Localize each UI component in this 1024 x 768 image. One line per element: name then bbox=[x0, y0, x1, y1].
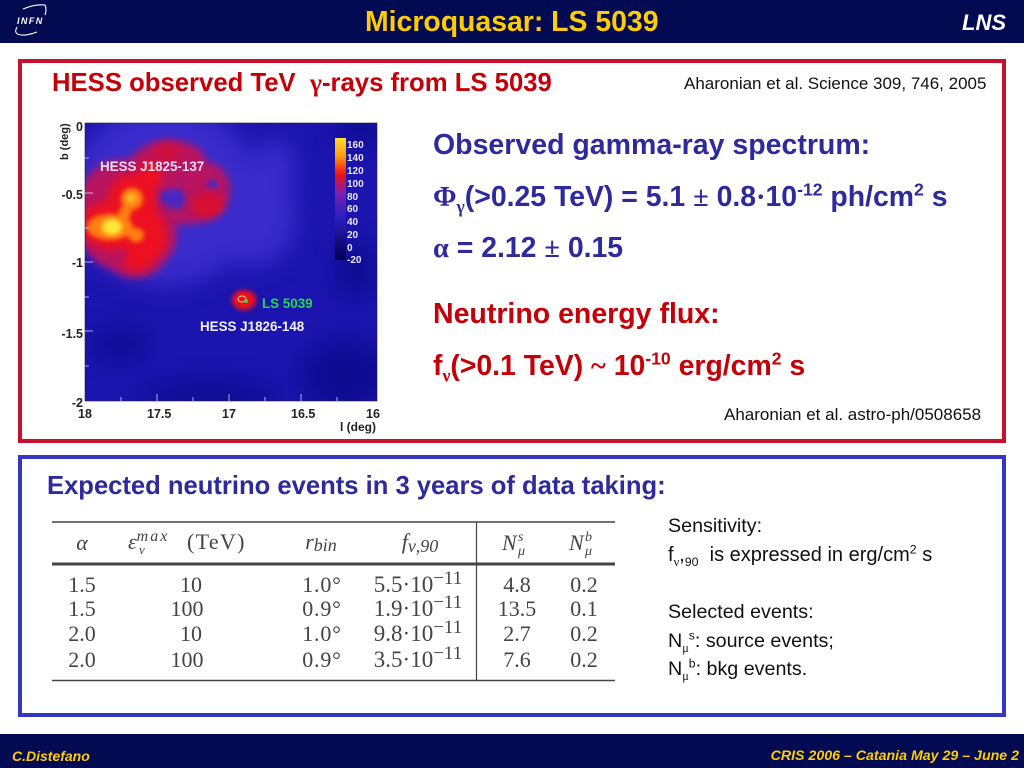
formula: neutrino: fν(>0.1 TeV) ~ 10-10 erg/cm2 s bbox=[433, 349, 805, 386]
table: neutrino events: 10 bbox=[180, 621, 202, 646]
table: neutrino events: 3.5·10 bbox=[374, 647, 433, 672]
table: neutrino events: 5.5·10 bbox=[374, 572, 433, 597]
footer bar bbox=[0, 734, 1024, 768]
axes: -1.5 bbox=[61, 327, 83, 341]
table: neutrino events: 9.8·10 bbox=[374, 621, 433, 646]
footer: conference: CRIS 2006 – Catania May 29 – June 2 bbox=[771, 748, 1019, 764]
source labels: HESS J1826-148 bbox=[200, 319, 305, 334]
color scale: 120 bbox=[347, 166, 364, 177]
table: neutrino events bbox=[52, 521, 615, 682]
source labels: HESS J1825-137 bbox=[100, 159, 204, 174]
panel: HESS observation bbox=[18, 59, 1006, 443]
color scale: 80 bbox=[347, 192, 359, 203]
axes: l (deg) bbox=[340, 420, 376, 434]
table: neutrino events: 0.1 bbox=[570, 596, 598, 621]
table: neutrino events: 2.0 bbox=[68, 621, 96, 646]
color scale: -20 bbox=[347, 255, 362, 266]
table: neutrino events: 10 bbox=[180, 572, 202, 597]
table: neutrino events: 7.6 bbox=[503, 647, 531, 672]
panel: expected events bbox=[18, 455, 1006, 717]
axes bbox=[59, 120, 380, 434]
color scale: 140 bbox=[347, 153, 364, 164]
color scale: 100 bbox=[347, 179, 364, 190]
icon: INFN logo bbox=[15, 4, 47, 36]
table: neutrino events: 2.0 bbox=[68, 647, 96, 672]
table: neutrino events: 13.5 bbox=[498, 596, 536, 621]
table: neutrino events: 0.2 bbox=[570, 572, 598, 597]
notes: sensitivity and selected events: Nμb: bkg events. bbox=[668, 656, 807, 683]
table: neutrino events: ν bbox=[139, 542, 145, 557]
table: neutrino events: 1.0° bbox=[302, 572, 342, 597]
formula: alpha: α = 2.12 ± 0.15 bbox=[433, 232, 623, 264]
color scale: 160 bbox=[347, 140, 364, 151]
axes: 18 bbox=[78, 407, 92, 421]
axes: -0.5 bbox=[61, 188, 83, 202]
axes: b (deg) bbox=[59, 123, 71, 160]
notes: sensitivity and selected events bbox=[668, 515, 932, 683]
table: neutrino events: α bbox=[76, 530, 88, 555]
heading: expected events: Expected neutrino events in 3 years of data taking: bbox=[47, 472, 666, 500]
table: neutrino events: 0.9° bbox=[302, 647, 342, 672]
table: neutrino events: r bbox=[305, 529, 314, 554]
table: neutrino events: 4.8 bbox=[503, 572, 531, 597]
table: neutrino events: 0.9° bbox=[302, 596, 342, 621]
table: neutrino events: bin bbox=[314, 535, 337, 555]
axes: -2 bbox=[72, 396, 83, 410]
citation: astro-ph: Aharonian et al. astro-ph/0508658 bbox=[724, 405, 981, 424]
table: neutrino events: μ bbox=[517, 544, 525, 559]
color scale: 20 bbox=[347, 230, 359, 241]
header bar bbox=[0, 0, 1024, 43]
axes: 17.5 bbox=[147, 407, 171, 421]
footer: author: C.Distefano bbox=[12, 748, 90, 764]
source contour bbox=[238, 296, 248, 303]
table: neutrino events: 1.0° bbox=[302, 621, 342, 646]
table: neutrino events: 2.7 bbox=[503, 621, 531, 646]
table: neutrino events: s bbox=[518, 530, 524, 545]
notes: sensitivity and selected events: Sensitivity: bbox=[668, 515, 762, 537]
text: neutrino flux bbox=[433, 298, 805, 386]
table: neutrino events: 1.5 bbox=[68, 596, 96, 621]
table: neutrino events: 0.2 bbox=[570, 647, 598, 672]
table: neutrino events: −11 bbox=[433, 592, 462, 613]
table: neutrino events: max bbox=[137, 528, 169, 545]
table: neutrino events: μ bbox=[584, 544, 592, 559]
table: neutrino events: N bbox=[568, 530, 585, 555]
notes: sensitivity and selected events: fν,90 is expressed in erg/cm2 s bbox=[668, 542, 932, 569]
table: neutrino events: −11 bbox=[433, 617, 462, 638]
table: neutrino events: ν,90 bbox=[408, 536, 438, 556]
table: neutrino events: ε bbox=[128, 529, 137, 554]
axes: 0 bbox=[76, 120, 83, 134]
citation: Science: Aharonian et al. Science 309, 746, 2005 bbox=[684, 74, 986, 93]
icon: INFN logo: INFN bbox=[17, 16, 44, 26]
text: neutrino flux: Neutrino energy flux: bbox=[433, 298, 720, 330]
table: neutrino events: f bbox=[402, 529, 408, 554]
table: neutrino events: N bbox=[501, 530, 518, 555]
table: neutrino events: −11 bbox=[433, 568, 462, 589]
chart: HESS sky map bbox=[59, 120, 380, 434]
table: neutrino events: b bbox=[585, 530, 592, 545]
table: neutrino events: 0.2 bbox=[570, 621, 598, 646]
axes: 17 bbox=[222, 407, 236, 421]
text: gamma-ray spectrum: Observed gamma-ray spectrum: bbox=[433, 129, 870, 161]
heading: HESS observed: HESS observed TeV γ-rays from LS 5039 bbox=[52, 68, 552, 97]
table: neutrino events: 100 bbox=[170, 647, 204, 672]
axes: 16.5 bbox=[291, 407, 315, 421]
axes: -1 bbox=[72, 256, 83, 270]
table: neutrino events: 100 bbox=[170, 596, 204, 621]
source labels bbox=[100, 159, 313, 334]
label: LNS: LNS bbox=[962, 10, 1006, 35]
table: neutrino events: 1.9·10 bbox=[374, 596, 433, 621]
text: gamma-ray spectrum bbox=[433, 129, 948, 264]
table: neutrino events: 1.5 bbox=[68, 572, 96, 597]
source labels: LS 5039 bbox=[262, 296, 313, 311]
notes: sensitivity and selected events: Selected events: bbox=[668, 601, 814, 623]
formula: flux: Φγ(>0.25 TeV) = 5.1 ± 0.8·10-12 ph/cm2 s bbox=[433, 180, 948, 217]
notes: sensitivity and selected events: Nμs: source events; bbox=[668, 628, 834, 655]
color scale: 60 bbox=[347, 204, 359, 215]
title: Microquasar: LS 5039 bbox=[365, 6, 658, 38]
color scale bbox=[335, 138, 364, 266]
table: neutrino events: −11 bbox=[433, 643, 462, 664]
axes: 16 bbox=[366, 407, 380, 421]
table: neutrino events: (TeV) bbox=[187, 529, 246, 554]
color scale: 0 bbox=[347, 243, 353, 254]
color scale: 40 bbox=[347, 217, 359, 228]
